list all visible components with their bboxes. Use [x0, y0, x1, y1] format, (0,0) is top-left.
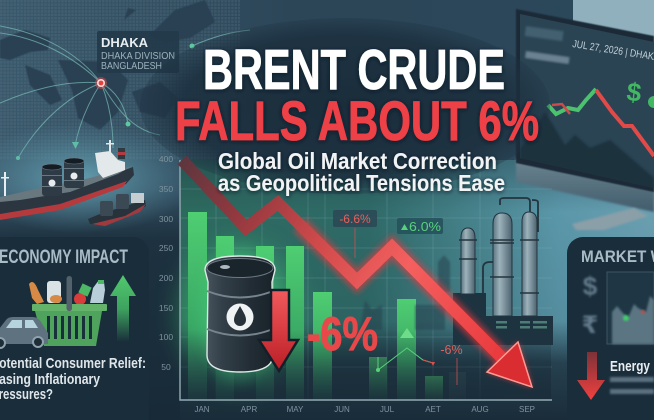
x axis labels: JUN [334, 405, 350, 414]
callout: -6.6%: -6.6% [339, 212, 371, 226]
tanker ship with oil barrels [0, 140, 134, 220]
icon: down arrow [577, 352, 605, 400]
y axis labels: 150 [159, 303, 173, 313]
y axis labels [159, 154, 173, 372]
big -6% label: -6% [307, 307, 378, 360]
y axis labels: 50 [161, 362, 171, 372]
y axis labels: 350 [159, 184, 173, 194]
monitor with market chart [516, 0, 654, 230]
x axis labels: JUL [380, 405, 395, 414]
x axis labels: AET [425, 405, 441, 414]
blurred caption lines [610, 377, 654, 394]
lower background [0, 190, 180, 420]
subtitle: Global Oil Market Correction [218, 148, 497, 174]
y axis labels: 100 [159, 332, 173, 342]
bars [188, 212, 466, 400]
monitor with market chart: $ [625, 76, 643, 108]
world map with trade routes [0, 0, 250, 160]
x axis labels: AUG [471, 405, 489, 414]
callout: small -6%: -6% [440, 343, 463, 357]
x axis labels: JAN [194, 405, 210, 414]
green glow [180, 245, 300, 385]
refinery [360, 198, 553, 345]
text: potential consumer relief [0, 355, 146, 403]
small tanker ship [88, 193, 146, 226]
title block [175, 38, 539, 196]
icon: dollar sign: $ [583, 271, 598, 301]
refinery tower 2 [490, 213, 514, 316]
location label: BANGLADESH [101, 61, 162, 72]
icon: green up arrow [110, 275, 136, 342]
refinery tower 3 [520, 212, 539, 316]
chart backdrop [180, 160, 654, 420]
callout: 6.0% [397, 218, 443, 234]
location label: DHAKA DIVISION [101, 51, 175, 62]
icon: rupee sign: ₹ [582, 311, 598, 339]
panel: market watch [567, 237, 654, 420]
refinery base building [453, 293, 553, 345]
y axis labels: 250 [159, 243, 173, 253]
shaded backdrop behind title [140, 18, 550, 194]
x axis labels: APR [241, 405, 257, 414]
callout: 6.0%: 6.0% [409, 220, 441, 234]
large red falling arrow [182, 160, 532, 387]
panel: economy impact [0, 237, 149, 420]
oil barrel icon [200, 249, 280, 381]
callout: small -6% [440, 343, 463, 385]
y axis labels: 300 [159, 214, 173, 224]
small green trend line [376, 328, 435, 372]
sea glow [0, 123, 200, 233]
title line 1: BRENT CRUDE [203, 38, 505, 102]
location label: DHAKA [101, 35, 149, 50]
small blurred chart [607, 272, 654, 344]
refinery tower 1 [459, 228, 477, 294]
x axis labels: SEP [519, 405, 535, 414]
callout: -6.6% [333, 210, 377, 258]
icon: car [0, 317, 48, 348]
chart axes [180, 160, 552, 400]
icon: shopping basket [29, 276, 107, 346]
x axis labels: MAY [287, 405, 304, 414]
panel heading: economy impact: ECONOMY IMPACT [0, 247, 128, 268]
line chart panel [180, 160, 552, 414]
title line 2: FALLS ABOUT 6% [175, 89, 539, 152]
bar fade [181, 330, 551, 400]
title block: as Geopolitical Tensions Ease [218, 170, 505, 196]
location label [97, 31, 179, 73]
x axis labels [194, 405, 535, 414]
icon: red down arrow [259, 290, 298, 371]
y axis labels: 400 [159, 154, 173, 164]
y axis labels: 200 [159, 273, 173, 283]
location marker: Dhaka [95, 77, 107, 89]
